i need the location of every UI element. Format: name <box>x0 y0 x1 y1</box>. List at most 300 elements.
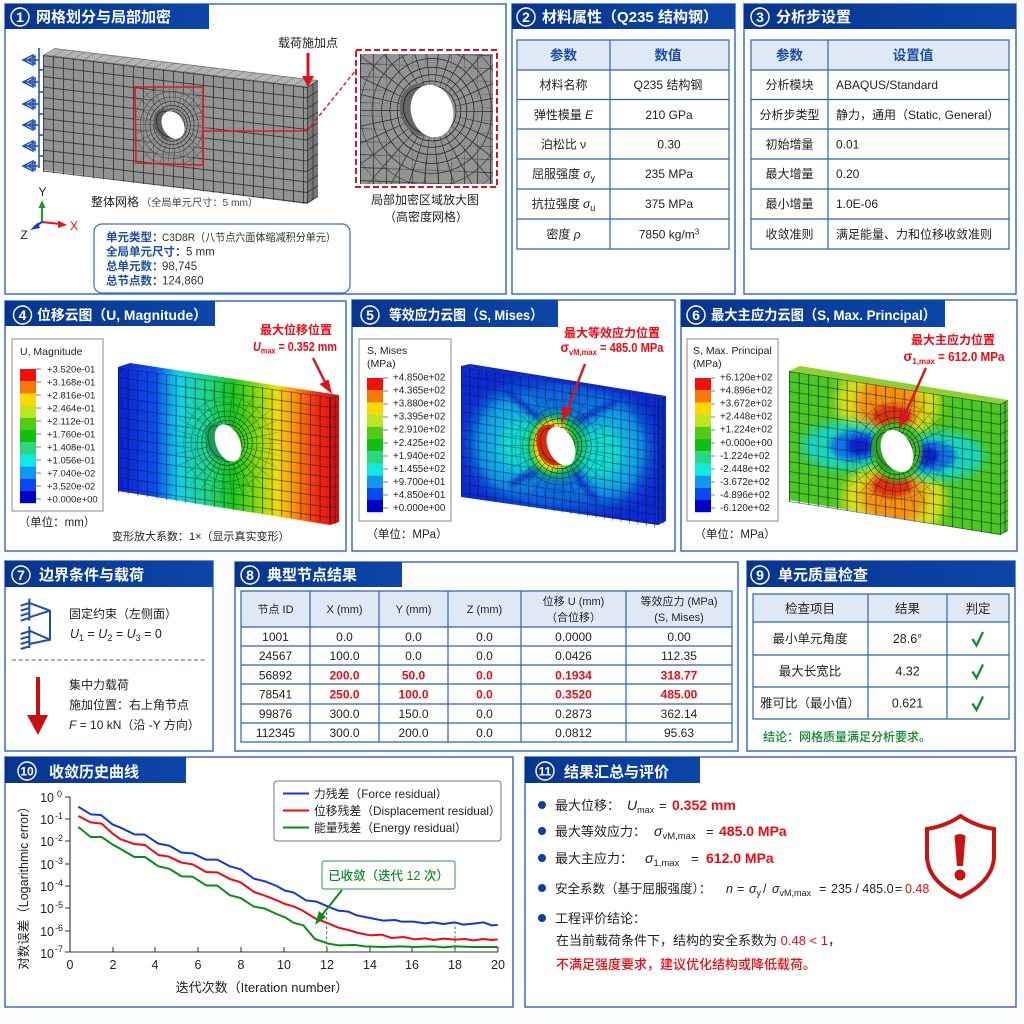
legend: displacement: +3.520e-01 <box>47 364 95 376</box>
table: material: u <box>590 203 595 213</box>
table: node results: 等效应力 (MPa) <box>640 594 718 608</box>
arrow: max Mises <box>568 364 585 408</box>
annotation: max Mises <box>560 325 664 357</box>
heading: panel 10: 收敛历史曲线 <box>49 763 139 781</box>
table: material: 参数 <box>550 47 578 63</box>
legend: principal: +0.000e+00 <box>720 438 773 449</box>
table: material: 泊松比 ν <box>541 138 586 152</box>
legend: principal <box>687 339 778 521</box>
table: quality: 判定 <box>965 601 991 616</box>
table: step settings: 静力，通用（Static, General） <box>836 108 999 122</box>
annotation: max Mises: 最大等效应力位置 <box>564 325 660 340</box>
legend: displacement: +2.816e-01 <box>47 390 95 402</box>
table: step settings <box>751 40 1009 249</box>
arrow: converged <box>315 890 342 925</box>
table: material: 3 <box>695 228 700 236</box>
panel: typical node results <box>235 562 738 751</box>
table: step settings: 最大增量 <box>765 167 814 181</box>
heading: panel 11 <box>525 757 700 783</box>
label: inset caption: 局部加密区域放大图 <box>371 192 479 207</box>
table: step settings: 最小增量 <box>765 197 814 211</box>
table: node results: 95.63 <box>664 726 694 740</box>
info box: mesh statistics: 全局单元尺寸： <box>106 244 186 258</box>
chart: convergence curves: -6 <box>55 923 63 933</box>
table: node results: 100.0 <box>329 649 360 663</box>
heading: panel 2 <box>512 4 735 29</box>
summary: max principal <box>538 850 774 869</box>
summary: max principal: σ <box>645 850 654 866</box>
table: material: 弹性模量 E <box>534 108 594 122</box>
table: material: 材料名称 <box>539 77 588 92</box>
legend: Mises: +3.395e+02 <box>393 412 445 422</box>
chart: convergence curves: 10 <box>40 835 54 849</box>
summary: max displacement: U <box>627 797 638 813</box>
annotation: max displacement: max <box>261 346 276 356</box>
legend: principal: (MPa) <box>693 358 722 370</box>
legend: Mises: +4.850e+01 <box>393 490 445 501</box>
chart: convergence curves: 16 <box>405 958 419 972</box>
table: material: 密度 ρ <box>546 226 581 242</box>
label: unit principal: （单位：MPa） <box>694 527 776 541</box>
table: material: Q235 结构钢 <box>634 77 702 92</box>
arrow head principal <box>899 411 910 429</box>
table: node results: 112345 <box>256 726 295 740</box>
chart: convergence curves: -3 <box>55 856 63 866</box>
table: node results: 485.00 <box>661 688 698 702</box>
summary: max displacement: = <box>659 798 667 813</box>
contour plate: Mises <box>461 364 666 528</box>
heading: panel 7: 边界条件与载荷 <box>39 566 144 584</box>
callout: converged: 已收敛（迭代 12 次） <box>328 868 449 883</box>
legend: displacement: +1.760e-01 <box>47 430 95 440</box>
info box: mesh statistics: 124,860 <box>162 276 204 288</box>
summary: max Mises: 485.0 MPa <box>719 823 787 839</box>
arrow: max displacement <box>313 358 325 382</box>
chart: convergence curves: 4 <box>152 958 159 972</box>
axis title: x: 迭代次数（Iteration number） <box>176 980 348 995</box>
text: fixed support: = <box>84 627 98 641</box>
heading: panel 8 <box>235 562 402 587</box>
table: quality: 雅可比（最小值） <box>760 696 860 710</box>
chart: convergence curves <box>40 789 505 972</box>
table: step settings: 满足能量、力和位移收敛准则 <box>836 226 992 242</box>
heading: panel 3: 3 <box>756 9 764 25</box>
table: node results: 0.1934 <box>555 668 592 682</box>
table: node results: 150.0 <box>398 707 429 721</box>
table: node results: 99876 <box>259 707 293 721</box>
summary: safety factor: n <box>726 882 733 896</box>
heading: panel 5: 等效应力云图（S, Mises） <box>389 307 543 323</box>
table: quality: 28.6° <box>893 632 922 646</box>
table: step settings: 0.20 <box>836 167 860 181</box>
summary: conclusion: 不满足强度要求，建议优化结构或降低载荷。 <box>556 957 816 972</box>
heading: panel 1 <box>5 4 209 29</box>
legend: principal: -1.224e+02 <box>720 451 770 462</box>
legend: displacement: U, Magnitude <box>20 346 83 358</box>
chart: convergence curves: 20 <box>491 958 505 972</box>
table: quality: 检查项目 <box>785 601 835 616</box>
table: node results: 0.00 <box>667 630 691 644</box>
annotation: max principal: σ <box>904 348 913 364</box>
annotation: max displacement: U <box>253 340 262 354</box>
panel: Mises stress contour <box>352 300 675 551</box>
label: unit: （单位：mm） <box>19 515 95 529</box>
table: step settings: 分析步类型 <box>759 108 820 122</box>
table: node results: 112.35 <box>661 649 697 663</box>
legend: Mises: +4.850e+02 <box>393 372 445 384</box>
summary: conclusion: 在当前载荷条件下，结构的安全系数为 0.48 < 1， <box>556 933 841 948</box>
annotation: max displacement: 最大位移位置 <box>260 322 332 337</box>
summary: max Mises: 最大等效应力： <box>555 824 646 839</box>
label: inset caption: （高密度网格） <box>384 209 468 224</box>
table: quality: 结果 <box>895 602 920 616</box>
arrow: max principal <box>905 368 926 414</box>
panel: displacement contour <box>5 301 346 551</box>
summary: max displacement: max <box>637 805 655 815</box>
text: load: 集中力载荷 <box>69 677 129 692</box>
table: node results: 250.0 <box>329 688 360 702</box>
table: node results: （合位移） <box>546 610 601 624</box>
text: load <box>69 677 200 732</box>
axis title: y: 对数误差（Logarithmic error） <box>16 800 31 970</box>
legend: residuals: 能量残差（Energy residual） <box>314 821 467 835</box>
leader line to zoom <box>203 130 307 132</box>
legend: Mises: +0.000e+00 <box>393 503 446 514</box>
heading: panel 4: 位移云图（U, Magnitude） <box>37 307 207 323</box>
legend: residuals: 位移残差（Displacement residual） <box>314 804 501 818</box>
text: fixed support: U <box>98 627 108 641</box>
heading: panel 9: 9 <box>756 567 764 583</box>
legend: displacement: +1.408e-01 <box>47 442 95 454</box>
summary: safety factor: = <box>737 882 744 896</box>
icon: coordinate axes: Z <box>20 228 28 242</box>
dashed leader <box>307 70 356 131</box>
arrow head <box>320 380 332 394</box>
heading: panel 3 <box>744 4 1016 29</box>
heading: panel 4 <box>5 301 215 326</box>
summary: max principal: 最大主应力： <box>555 851 633 866</box>
annotation: max Mises: vM,max <box>569 347 597 357</box>
summary: conclusion: 工程评价结论： <box>555 911 646 926</box>
annotation: max principal: = 612.0 MPa <box>935 350 1005 364</box>
heading: panel 7 <box>5 561 213 587</box>
heading: panel 6 <box>681 300 945 327</box>
chart: convergence curves: 6 <box>195 958 202 972</box>
table: node results: 300.0 <box>329 707 360 721</box>
table: node results: 318.77 <box>661 668 698 682</box>
legend: principal: -4.896e+02 <box>720 490 770 501</box>
chart: convergence curves: 2 <box>110 958 117 972</box>
chart: convergence curves: 10 <box>40 925 54 939</box>
table: step settings: 设置值 <box>893 48 934 63</box>
table: node results: 0.0426 <box>555 649 592 663</box>
contour plate: displacement <box>118 363 339 525</box>
table: material: 210 GPa <box>645 108 693 122</box>
table: node results: Z (mm) <box>467 604 502 616</box>
table: node results: 0.0 <box>405 630 422 644</box>
table: material: 235 MPa <box>645 167 693 181</box>
legend: principal: -3.672e+02 <box>720 477 770 488</box>
icon: load arrow <box>27 677 48 735</box>
label: unit Mises: （单位：MPa） <box>366 527 448 541</box>
legend: principal: S, Max. Principal <box>693 345 772 357</box>
icon: fixed support <box>21 599 50 649</box>
table: node results: 0.2873 <box>555 707 592 721</box>
legend: Mises: +1.940e+02 <box>393 451 445 462</box>
text: load: F = 10 kN（沿 -Y 方向） <box>69 717 200 732</box>
icon: coordinate axes: X <box>70 219 78 233</box>
icon: coordinate axes: Y <box>38 185 47 199</box>
legend: displacement: +3.520e-02 <box>47 482 95 492</box>
table: material: 屈服强度 σ <box>532 167 591 181</box>
heading: panel 1: 1 <box>16 9 24 25</box>
table: material: 7850 kg/m <box>639 228 695 242</box>
summary: max Mises <box>538 823 787 842</box>
table: node results: 0.0 <box>405 649 422 663</box>
summary: safety factor: vM,max <box>780 888 812 898</box>
heading: panel 2: 材料属性（Q235 结构钢） <box>542 8 718 26</box>
summary: safety factor: y <box>757 888 762 898</box>
heading: panel 5: 5 <box>366 307 374 323</box>
heading: panel 7: 7 <box>17 567 25 583</box>
panel: analysis step settings <box>744 4 1016 294</box>
chart: convergence curves: 10 <box>40 791 54 805</box>
legend: Mises: +4.365e+02 <box>393 386 445 396</box>
chart: convergence curves: -7 <box>55 944 63 954</box>
heading: panel 10: 10 <box>20 764 34 778</box>
table: material: 375 MPa <box>645 197 693 211</box>
table: step settings: 参数 <box>776 47 804 63</box>
chart: convergence curves: 10 <box>277 958 291 972</box>
table: quality: 4.32 <box>895 664 920 678</box>
legend: principal: +3.672e+02 <box>720 398 772 410</box>
annotation: max Mises: σ <box>560 339 569 355</box>
heading: panel 5 <box>352 300 558 327</box>
summary: safety factor: σ <box>772 882 780 896</box>
refined region box <box>135 87 203 165</box>
heading: panel 9: 单元质量检查 <box>778 566 868 584</box>
text: quality conclusion: 结论：网格质量满足分析要求。 <box>763 729 931 744</box>
table: step settings: 收敛准则 <box>765 226 814 242</box>
text: fixed support <box>69 606 177 643</box>
summary: safety factor: σ <box>749 882 757 896</box>
table: node results: 0.0 <box>476 668 493 682</box>
summary: safety factor: 安全系数（基于屈服强度）： <box>555 881 711 896</box>
legend: principal: +6.120e+02 <box>720 372 772 384</box>
table: node results: 50.0 <box>402 668 426 682</box>
chart: convergence curves: 10 <box>40 813 54 827</box>
table: node results: 位移 U (mm) <box>543 594 604 608</box>
callout: converged <box>322 861 455 889</box>
table: node results: 1001 <box>262 630 289 644</box>
table: node results: 0.0 <box>476 707 493 721</box>
table: quality: 最大长宽比 <box>779 664 841 678</box>
table: node results: (S, Mises) <box>654 612 704 624</box>
table: node results: 0.0 <box>476 649 493 663</box>
table: node results: 0.0 <box>476 688 493 702</box>
text: fixed support: 1 <box>79 633 84 643</box>
summary: safety factor: 235 / 485.0 <box>831 882 894 896</box>
table: node results: 节点 ID <box>257 603 294 616</box>
text: fixed support: U <box>127 627 137 641</box>
legend: Mises: S, Mises <box>367 345 407 357</box>
legend: Mises: +9.700e+01 <box>393 477 445 488</box>
info box: mesh statistics <box>94 224 350 293</box>
icon: fixed boundary arrows <box>23 48 43 171</box>
chart: convergence curves: 10 <box>40 858 54 872</box>
summary: max Mises: σ <box>654 823 663 839</box>
legend: displacement: +0.000e+00 <box>47 494 98 506</box>
legend: principal: -2.448e+02 <box>720 464 770 475</box>
annotation: max displacement: = 0.352 mm <box>275 340 337 354</box>
info box: mesh statistics: 98,745 <box>162 261 197 273</box>
legend: displacement <box>12 339 103 511</box>
legend: Mises: +2.425e+02 <box>393 438 445 449</box>
heading: panel 6: 最大主应力云图（S, Max. Principal） <box>711 307 936 323</box>
annotation: max principal: 最大主应力位置 <box>911 332 995 347</box>
table: step settings: 0.01 <box>836 138 860 152</box>
chart: convergence curves: 0 <box>67 958 74 972</box>
table: node results: 200.0 <box>398 726 429 740</box>
summary: safety factor: 0.48 <box>905 882 929 896</box>
summary: safety factor: = <box>819 882 826 896</box>
legend: residuals <box>274 781 501 841</box>
table: material: 0.30 <box>657 138 681 152</box>
summary: max principal: 1,max <box>653 858 680 869</box>
summary: safety factor <box>538 881 929 898</box>
panel: convergence history <box>5 757 513 1007</box>
summary: max principal: = <box>691 851 699 866</box>
table: step settings: 1.0E-06 <box>836 197 878 211</box>
text: fixed support: = 0 <box>141 627 162 641</box>
chart: convergence curves: -4 <box>55 878 63 888</box>
annotation: max principal: 1,max <box>912 356 935 366</box>
heading: panel 10 <box>5 757 186 783</box>
annotation: max Mises: = 485.0 MPa <box>597 341 664 355</box>
legend: displacement: +2.112e-01 <box>47 416 95 428</box>
legend: displacement: +3.168e-01 <box>47 378 95 388</box>
table: node results: 300.0 <box>329 726 360 740</box>
table: node results: 0.0 <box>476 630 493 644</box>
table: node results: Y (mm) <box>396 604 431 616</box>
panel: mesh and local refinement <box>5 4 518 294</box>
legend: Mises: +1.455e+02 <box>393 464 445 475</box>
chart: convergence curves: 10 <box>40 902 54 916</box>
summary: max displacement: 0.352 mm <box>672 797 736 813</box>
table: node results: 200.0 <box>329 668 360 682</box>
legend: displacement: +7.040e-02 <box>47 468 95 480</box>
arrow: load <box>302 53 314 87</box>
heading: panel 1: 网格划分与局部加密 <box>36 8 171 26</box>
label: inset caption <box>371 192 479 224</box>
table: node results: 24567 <box>259 649 293 663</box>
table: node results: 0.0812 <box>555 726 592 740</box>
info box: mesh statistics: 总节点数： <box>106 274 164 288</box>
table: node results: 56892 <box>259 668 293 682</box>
summary: safety factor: = <box>895 882 902 896</box>
chart: convergence curves: -5 <box>55 900 63 910</box>
plate mesh model <box>43 48 319 204</box>
annotation: max principal <box>904 332 1005 366</box>
panel: summary and evaluation <box>525 757 1016 1007</box>
heading: panel 9 <box>747 561 1015 587</box>
summary: max Mises: vM,max <box>662 831 696 842</box>
table: node results: 100.0 <box>398 688 429 702</box>
summary: safety factor: / <box>763 882 767 896</box>
summary: max Mises: = <box>706 824 714 839</box>
table: node results: 362.14 <box>661 707 698 721</box>
panel: boundary conditions and load <box>5 561 213 751</box>
icon: coordinate axes <box>20 185 78 242</box>
table: quality <box>753 594 1009 719</box>
hole: displacement plate <box>200 419 246 466</box>
text: fixed support: 固定约束（左侧面） <box>69 606 177 621</box>
table: node results: 0.0000 <box>555 630 592 644</box>
summary: max displacement: 最大位移： <box>555 798 620 813</box>
text: fixed support: 2 <box>107 633 112 643</box>
panel: max principal stress contour <box>681 300 1017 551</box>
text: fixed support: U <box>70 627 80 641</box>
table: node results: 0.0 <box>476 726 493 740</box>
table: step settings: 初始增量 <box>765 138 814 152</box>
heading: panel 6: 6 <box>692 307 700 323</box>
legend: Mises <box>359 339 451 521</box>
chart: convergence curves: 10 <box>40 947 54 961</box>
label: overall mesh caption: 整体网格（全局单元尺寸：5 mm） <box>91 194 258 209</box>
hole: Mises plate <box>531 420 581 470</box>
zoomed refined mesh inset <box>355 49 498 188</box>
table: node results: 0.0 <box>336 630 353 644</box>
legend: principal: +1.224e+02 <box>720 424 772 436</box>
text: fixed support: 3 <box>136 633 141 643</box>
label: load point: 载荷施加点 <box>278 36 338 50</box>
table: quality: 最小单元角度 <box>772 631 848 646</box>
legend: Mises: (MPa) <box>367 358 396 370</box>
legend: displacement: +1.056e-01 <box>47 456 95 466</box>
heading: panel 8: 8 <box>246 567 254 583</box>
chart: convergence curves: 12 <box>320 958 334 972</box>
chart: convergence curves: 0 <box>57 789 62 799</box>
info box: mesh statistics: 总单元数： <box>106 259 164 273</box>
heading: panel 2: 2 <box>522 9 530 25</box>
heading: panel 4: 4 <box>19 307 27 323</box>
summary: max principal: 612.0 MPa <box>706 850 774 866</box>
heading: panel 3: 分析步设置 <box>776 8 851 26</box>
hole in plate <box>149 105 189 143</box>
table: material <box>517 40 729 249</box>
text: load: 施加位置：右上角节点 <box>69 697 189 712</box>
legend: Mises: +3.880e+02 <box>393 398 445 410</box>
label: deformation scale: 变形放大系数：1×（显示真实变形） <box>112 529 290 543</box>
arrow head Mises <box>561 406 573 423</box>
panel: material properties <box>512 4 735 294</box>
table: material: 抗拉强度 σ <box>532 197 590 211</box>
annotation: max displacement <box>253 322 337 356</box>
table: step settings: ABAQUS/Standard <box>836 78 938 92</box>
heading: panel 11: 11 <box>539 764 552 778</box>
chart: convergence curves: 14 <box>363 958 377 972</box>
legend: principal: +4.896e+02 <box>720 386 772 396</box>
heading: panel 8: 典型节点结果 <box>267 566 357 584</box>
chart: convergence curves: 10 <box>40 880 54 894</box>
table: node results: X (mm) <box>326 604 363 616</box>
legend: Mises: +2.910e+02 <box>393 424 445 436</box>
info box: mesh statistics: 5 mm <box>186 246 215 258</box>
info box: mesh statistics: 单元类型： <box>106 230 164 244</box>
chart: convergence curves: 8 <box>238 958 245 972</box>
table: node results <box>241 591 732 742</box>
table: material: 数值 <box>654 47 682 63</box>
